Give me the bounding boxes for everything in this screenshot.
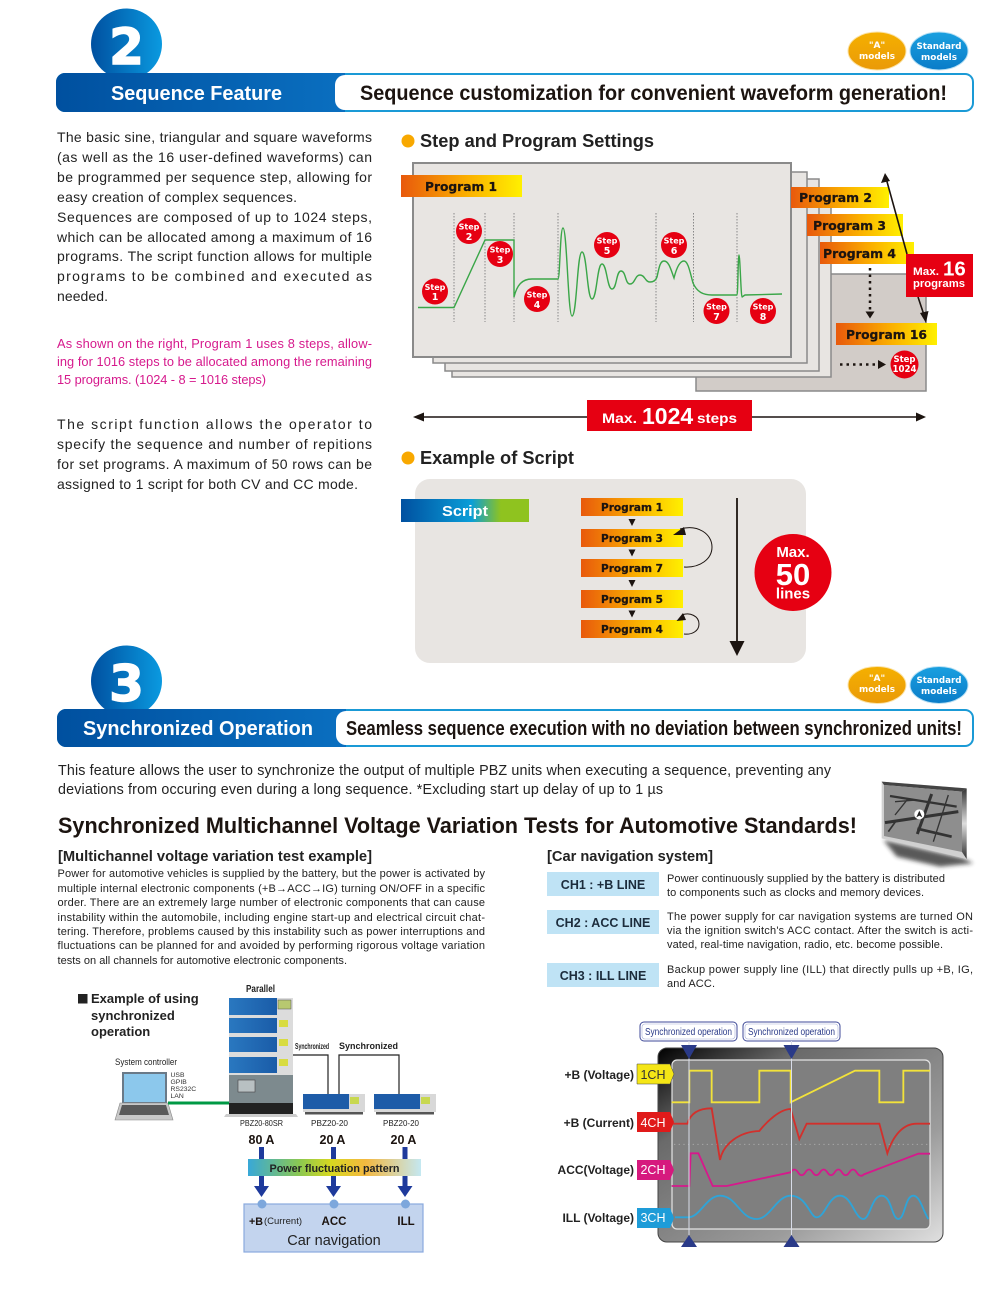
model badges bottom	[848, 666, 968, 704]
model labels: PBZ20-20	[383, 1118, 419, 1128]
multichannel example text: tering. Therefore, problems caused by this instability such as power interruptions and	[58, 926, 485, 938]
program labels: Program 1	[425, 179, 497, 194]
current labels: 80 A	[249, 1133, 274, 1147]
step markers: 3	[497, 255, 503, 266]
pink note text: ing for 1016 steps to be allocated among the remaining	[57, 354, 372, 369]
pink note text: 15 programs. (1024 - 8 = 1016 steps)	[57, 372, 266, 387]
channel tag 2CH: ACC(Voltage)	[558, 1163, 634, 1177]
car navigation box: (Current)	[264, 1216, 302, 1227]
model badges bottom: models	[921, 687, 957, 697]
step markers: Step	[425, 283, 446, 292]
current labels	[249, 1133, 416, 1147]
system controller laptop	[115, 1057, 232, 1120]
step markers	[422, 218, 776, 324]
model badges top: models	[859, 52, 895, 62]
intro text block: programs. The script function allows for multiple	[57, 248, 372, 264]
program list: Program 7	[601, 563, 663, 575]
program list	[581, 498, 683, 638]
program list: Program 4	[601, 624, 663, 636]
multichannel example text: multiple internal electronic components (+B→ACC→IG) turning ON/OFF in a specific	[58, 883, 486, 895]
heading: example of script: Example of Script	[420, 447, 574, 468]
system controller laptop: System controller	[115, 1057, 177, 1067]
program labels: Program 4	[823, 246, 896, 261]
intro text block: (as well as the 16 user-defined waveforms) can	[57, 149, 372, 165]
step markers: Step	[597, 236, 618, 246]
script function text: for set programs. A maximum of 50 rows can be	[57, 456, 372, 472]
max 1024 steps span	[413, 400, 926, 431]
intro text block: programs to be combined and executed as	[57, 268, 372, 284]
step markers: Step	[527, 290, 548, 300]
section 3 header bar	[57, 709, 974, 747]
step markers: Step	[753, 302, 774, 312]
system controller laptop: RS232C	[170, 1086, 196, 1093]
system controller laptop: GPIB	[170, 1079, 187, 1086]
section 2 number badge	[91, 8, 162, 80]
green waveform	[418, 228, 782, 316]
synchronization intro text: This feature allows the user to synchronize the output of multiple PBZ units when executing a sequence, preventing any	[58, 763, 832, 779]
program list: Program 5	[601, 594, 663, 606]
script function text: specify the sequence and number of repitions	[57, 436, 372, 452]
section 3 header bar: Synchronized Operation	[83, 718, 313, 740]
CH3 row	[547, 963, 973, 990]
intro text block: be programmed per sequence step, allowing for	[57, 169, 372, 185]
CH1 row: Power continuously supplied by the battery is distributed	[667, 873, 945, 885]
section 2 header bar: Sequence Feature	[111, 83, 282, 105]
channel tag 1CH	[565, 1064, 674, 1084]
multichannel example text	[58, 849, 486, 967]
max 16 programs callout: 16	[943, 258, 966, 280]
system controller laptop: LAN	[170, 1093, 184, 1100]
system controller laptop: USB	[170, 1072, 185, 1079]
synchronized labels	[295, 1041, 398, 1052]
section 2 number badge: 2	[109, 18, 144, 76]
step markers: Step	[459, 222, 480, 232]
synchronized operation example diagram	[78, 984, 436, 1252]
max 16 programs callout	[906, 254, 973, 297]
intro text block: The basic sine, triangular and square waveforms	[57, 129, 372, 145]
channel tag 2CH: 2CH	[640, 1163, 666, 1177]
program labels: Program 2	[799, 190, 872, 205]
CH1 row	[547, 872, 945, 899]
step 1024 marker: 1024	[892, 364, 917, 375]
program labels: Program 16	[846, 327, 927, 342]
model badges bottom: models	[859, 685, 895, 695]
car navigation box: +B	[249, 1216, 263, 1228]
script function text	[57, 416, 372, 492]
CH2 row	[547, 910, 973, 951]
section 3 number badge: 3	[109, 655, 144, 713]
CH3 row: CH3 : ILL LINE	[560, 969, 646, 983]
multichannel example text: order. There are an extremely large number of electronic components that can cause	[58, 897, 485, 909]
step 1024 marker	[840, 350, 918, 378]
power fluctuation pattern bar: Power fluctuation pattern	[270, 1163, 400, 1175]
step markers: 2	[466, 232, 472, 243]
model badges top: "A"	[869, 41, 885, 51]
channel tag 3CH: ILL (Voltage)	[562, 1211, 634, 1225]
line direction arrow	[730, 498, 744, 656]
CH2 row: vated, real-time navigation, radio, etc. become possible.	[667, 939, 943, 951]
example heading: synchronized	[91, 1008, 175, 1023]
intro text block: which can be allocated among a maximum of 16	[56, 229, 372, 245]
CH2 row: via the ignition switch's ACC contact. After the switch is acti-	[667, 925, 973, 937]
script function text: assigned to 1 script for both CV and CC mode.	[57, 476, 358, 492]
synchronization intro text: deviations from occuring even during a long sequence. *Excluding start up delay of up to 1 µs	[58, 782, 663, 798]
step markers: Step	[664, 236, 685, 246]
current arrows	[254, 1147, 412, 1197]
channel tag 3CH	[562, 1208, 674, 1228]
section 3 number badge	[91, 646, 162, 716]
max 16 programs callout: Max.	[913, 266, 939, 278]
stacked program pages diagram	[401, 163, 973, 391]
dotted continuation arrow	[866, 268, 874, 318]
car navigation box: ACC	[322, 1216, 346, 1228]
script label: Script	[442, 504, 488, 520]
model badges top	[848, 32, 968, 70]
max 16 programs arrow	[881, 173, 928, 323]
oscilloscope waveform chart	[558, 1022, 943, 1247]
sync operation labels	[640, 1022, 840, 1041]
model badges top: Standard	[916, 42, 962, 52]
loop arrows	[673, 527, 712, 634]
max 50 lines callout	[754, 534, 832, 611]
step markers: 7	[713, 312, 720, 323]
channel tag 2CH	[558, 1160, 674, 1180]
max 50 lines callout: lines	[776, 586, 810, 602]
car navigation system table: [Car navigation system]	[547, 849, 713, 865]
synchronized labels: Synchronized	[295, 1042, 329, 1051]
program labels: Program 3	[813, 218, 886, 233]
CH1 row: CH1 : +B LINE	[561, 878, 645, 892]
channel tag 4CH	[564, 1112, 674, 1132]
model badges top: models	[921, 53, 957, 63]
script panel	[401, 479, 832, 663]
power fluctuation pattern bar	[248, 1159, 421, 1176]
parallel rack	[224, 984, 298, 1117]
multichannel example text: instability within the automobile, including engine start-up and electrical circuit chat-	[58, 912, 485, 924]
scope body	[658, 1048, 943, 1242]
model labels: PBZ20-80SR	[240, 1118, 283, 1128]
model labels	[240, 1118, 419, 1128]
program list: Program 1	[601, 502, 663, 514]
CH3 row: and ACC.	[667, 978, 715, 990]
script function text: The script function allows the operator to	[57, 416, 372, 432]
model badges bottom: "A"	[869, 674, 885, 684]
max 1024 steps span: 1024	[642, 403, 693, 429]
example heading: operation	[91, 1024, 150, 1039]
current labels: 20 A	[391, 1133, 416, 1147]
model badges bottom: Standard	[916, 676, 962, 686]
step markers: Step	[706, 302, 727, 312]
program labels	[401, 175, 937, 345]
channel tag 4CH: +B (Current)	[564, 1116, 634, 1130]
car navigation box: Car navigation	[287, 1233, 381, 1249]
section 2 header bar	[56, 73, 974, 112]
step markers: 6	[671, 246, 678, 257]
car navigation box: ILL	[397, 1216, 415, 1228]
CH2 row: CH2 : ACC LINE	[556, 916, 650, 930]
intro text block: easy creation of complex sequences.	[57, 189, 297, 205]
pink note text	[57, 336, 372, 387]
pink note text: As shown on the right, Program 1 uses 8 steps, allow-	[57, 336, 372, 351]
channel tag 1CH: 1CH	[640, 1068, 666, 1082]
intro text block	[56, 129, 372, 304]
waveforms	[672, 1071, 930, 1219]
icon: car navigation screen	[882, 782, 973, 867]
sync operation labels: Synchronized operation	[748, 1027, 835, 1038]
step markers: 4	[534, 300, 541, 311]
CH3 row: Backup power supply line (ILL) that directly pulls up +B, IG,	[667, 964, 973, 976]
step markers: 8	[760, 312, 767, 323]
channel tag 3CH: 3CH	[640, 1211, 666, 1225]
car navigation system table	[547, 849, 973, 990]
sync wiring	[293, 1055, 399, 1094]
heading: step and program settings: Step and Program Settings	[420, 130, 654, 151]
max 1024 steps span: steps	[697, 410, 737, 426]
max 16 programs callout: programs	[913, 278, 965, 290]
channel tag 4CH: 4CH	[640, 1116, 666, 1130]
synchronized labels: Synchronized	[339, 1041, 398, 1052]
model labels: PBZ20-20	[311, 1118, 348, 1128]
scope screen	[672, 1060, 930, 1229]
intro text block: needed.	[57, 288, 108, 304]
step markers: 5	[604, 246, 610, 257]
sync operation labels: Synchronized operation	[645, 1027, 732, 1038]
multichannel example text: Power for automotive vehicles is supplied by the battery, but the power is activated by	[58, 868, 486, 880]
program list: Program 3	[601, 533, 663, 545]
CH1 row: to components such as clocks and memory devices.	[667, 887, 924, 899]
multichannel example text: tests on all channels for automotive electronic components.	[58, 955, 347, 967]
step boundary lines	[454, 213, 737, 322]
step markers: Step	[490, 246, 511, 254]
parallel rack: Parallel	[246, 984, 275, 995]
max 50 lines callout: Max.	[776, 544, 810, 561]
current labels: 20 A	[320, 1133, 345, 1147]
example heading: Example of using	[91, 991, 199, 1006]
step markers: 1	[432, 292, 438, 303]
multichannel example text: [Multichannel voltage variation test example]	[58, 849, 372, 865]
multichannel example text: fluctuations can be planned for and avoided by performing rigorous voltage variation	[58, 940, 485, 952]
CH2 row: The power supply for car navigation systems are turned ON	[667, 911, 973, 923]
intro text block: Sequences are composed of up to 1024 steps,	[57, 209, 372, 225]
example heading	[78, 991, 199, 1039]
car navigation box	[244, 1200, 423, 1252]
PBZ20-20 units	[303, 1094, 436, 1114]
script label	[401, 499, 529, 522]
step 1024 marker: Step	[893, 355, 916, 365]
automotive title: Synchronized Multichannel Voltage Variation Tests for Automotive Standards!	[58, 813, 857, 838]
sync markers	[681, 1041, 800, 1247]
max 50 lines callout: 50	[776, 557, 810, 592]
synchronization intro text	[58, 763, 832, 798]
section 2 header bar: Sequence customization for convenient waveform generation!	[360, 82, 947, 105]
channel tag 1CH: +B (Voltage)	[565, 1068, 634, 1082]
max 1024 steps span: Max.	[602, 410, 637, 426]
